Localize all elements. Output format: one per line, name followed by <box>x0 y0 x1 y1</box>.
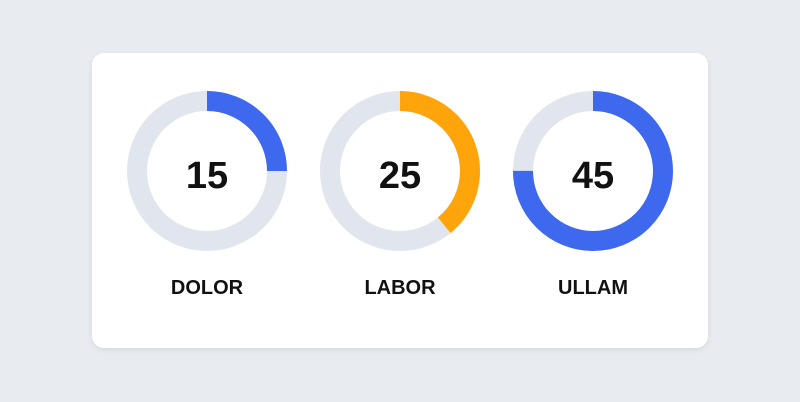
donut: ullam 45 <box>523 101 663 241</box>
label: dolor: DOLOR <box>171 277 243 299</box>
donut: labor 25 <box>330 101 470 241</box>
donut: ullam 45: 45 <box>572 155 614 197</box>
donut: dolor 15: 15 <box>186 155 228 197</box>
card panel <box>92 53 708 348</box>
donut: dolor 15 <box>137 101 277 241</box>
label: ullam: ULLAM <box>558 277 628 299</box>
donut: labor 25: 25 <box>379 155 421 197</box>
label: labor: LABOR <box>364 277 436 299</box>
